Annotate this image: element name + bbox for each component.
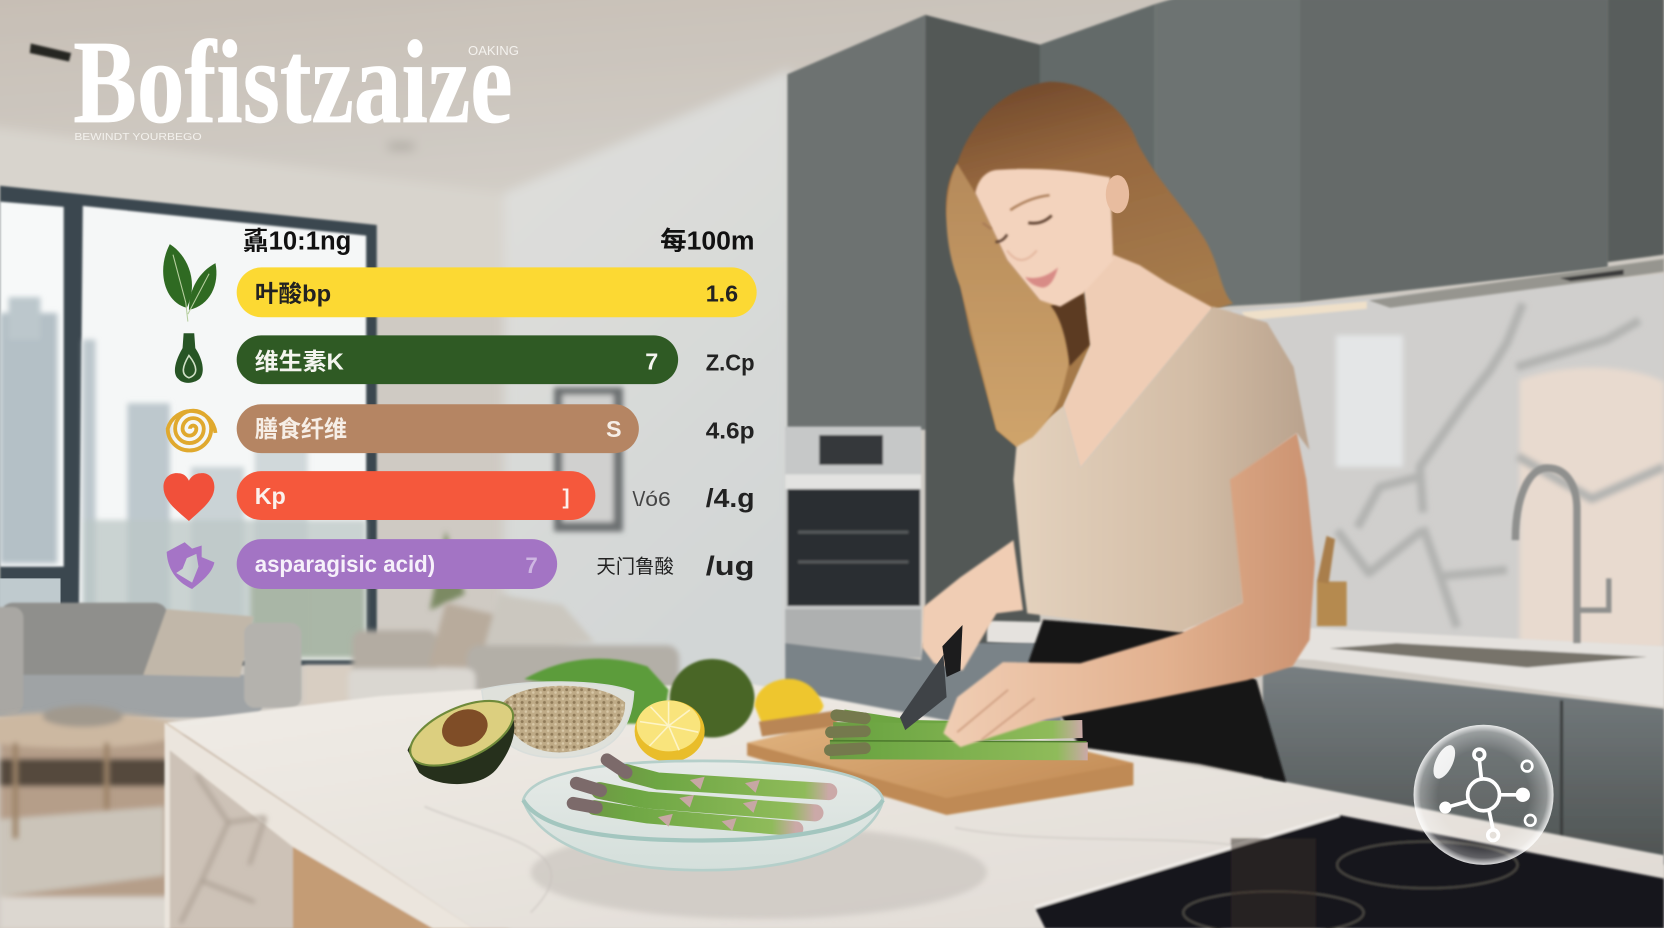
bubble sphere — [1414, 725, 1554, 865]
bar label: asparagisic acid) — [255, 551, 435, 577]
halved avocado — [401, 688, 522, 784]
glass bowl with asparagus — [523, 760, 987, 919]
window reflection — [1336, 335, 1403, 467]
oven — [785, 427, 1061, 722]
marble backsplash — [1231, 274, 1664, 653]
glass bowl — [482, 682, 634, 758]
left hand with knife — [900, 540, 1023, 730]
middle label: 天门鲁酸 — [596, 556, 674, 578]
asparagus spears — [573, 760, 829, 829]
island marble side — [170, 750, 293, 928]
left arm — [922, 540, 1023, 671]
molecule bubble icon — [1414, 725, 1554, 865]
bowl of grains — [482, 682, 634, 758]
dark hair under chin — [1051, 293, 1090, 366]
island wood side — [293, 847, 433, 928]
whole avocado — [670, 659, 755, 738]
bowl rim — [523, 800, 883, 840]
row: potassium — [163, 471, 755, 521]
title: Bofistzaize — [73, 16, 513, 148]
neck and chest — [1063, 255, 1213, 468]
row: aspartic acid — [167, 539, 755, 589]
blouse — [1013, 307, 1310, 632]
knife blade — [900, 655, 947, 730]
picture frame on wall — [554, 387, 623, 532]
facial features — [983, 195, 1058, 288]
icon: leaves — [163, 244, 216, 322]
warm sunlight patch — [1520, 368, 1664, 649]
bar value: 7 — [645, 348, 658, 374]
ceiling vent — [30, 44, 71, 62]
island marble edge — [165, 723, 473, 928]
ceiling and back wall — [0, 0, 1252, 722]
bar label: 膳食纤维 — [255, 415, 347, 442]
coffee table — [0, 706, 185, 838]
knife handle — [942, 625, 963, 677]
spear scales — [658, 777, 760, 831]
row: dietary fiber — [168, 404, 755, 453]
outside value: Z.Cp — [706, 349, 755, 375]
reflection on counter — [531, 826, 987, 919]
marble veins — [1337, 303, 1664, 627]
kitchen island countertop — [165, 684, 1664, 928]
right sofa — [348, 594, 679, 705]
floor and rug — [0, 732, 509, 928]
back counter and lower cabinets — [987, 621, 1664, 865]
induction cooktop — [1035, 815, 1664, 928]
outside value: /4.g — [706, 485, 755, 513]
upper kitchen cabinets — [787, 0, 1664, 679]
outside value: 4.6p — [706, 417, 755, 443]
row: folate — [163, 244, 757, 322]
marble veins on island side — [180, 775, 265, 923]
icon: heart — [163, 473, 214, 521]
molecule — [1441, 749, 1536, 840]
row: vitamin K — [175, 333, 755, 384]
left sofa — [0, 603, 301, 717]
skirt — [1028, 620, 1286, 782]
cutting board — [747, 711, 1133, 815]
left hair lock — [946, 163, 1085, 447]
bowl — [523, 761, 883, 870]
lemon half — [635, 700, 705, 762]
grains — [503, 686, 625, 752]
bar: folate — [237, 267, 757, 317]
whole lemon — [755, 679, 824, 724]
face — [975, 169, 1113, 307]
bar: aspartic acid — [237, 539, 557, 589]
middle value: \/ó6 — [632, 489, 671, 511]
bar: potassium — [237, 471, 595, 520]
bar value: 7 — [525, 553, 538, 578]
ear — [1106, 175, 1129, 213]
icon: spiral — [168, 411, 215, 450]
window with city view — [0, 186, 377, 665]
wall under window — [304, 665, 367, 708]
bar: vitamin K — [237, 335, 678, 384]
bar value: ] — [562, 486, 570, 509]
bar label: 维生素K — [255, 348, 344, 374]
faucet — [1515, 468, 1609, 643]
small label above title: OAKING — [468, 43, 519, 58]
back hair — [946, 82, 1233, 447]
asparagus on cutting board — [830, 715, 1088, 751]
plant — [430, 531, 465, 610]
subtitle: BEWINDT YOURBEGO — [74, 132, 202, 143]
bar value: S — [606, 416, 622, 442]
woman slicing asparagus — [946, 82, 1310, 782]
bar label: 叶酸bp — [255, 280, 331, 306]
right column header: 每100m — [660, 227, 755, 255]
icon: purple shield — [167, 542, 214, 589]
utensil holder — [1317, 536, 1347, 626]
greens behind bowl — [524, 659, 669, 724]
range hood and light strip — [1242, 259, 1664, 320]
icon: flask drop — [175, 333, 203, 383]
bar value: 1.6 — [706, 280, 738, 306]
outside value: /ug — [706, 551, 755, 581]
right arm and hand — [943, 433, 1315, 747]
bar: fiber — [237, 404, 639, 453]
bubble highlight — [1429, 742, 1460, 782]
bar label: Kp — [255, 483, 286, 509]
left column header: 鼒10:1ng — [243, 227, 351, 255]
